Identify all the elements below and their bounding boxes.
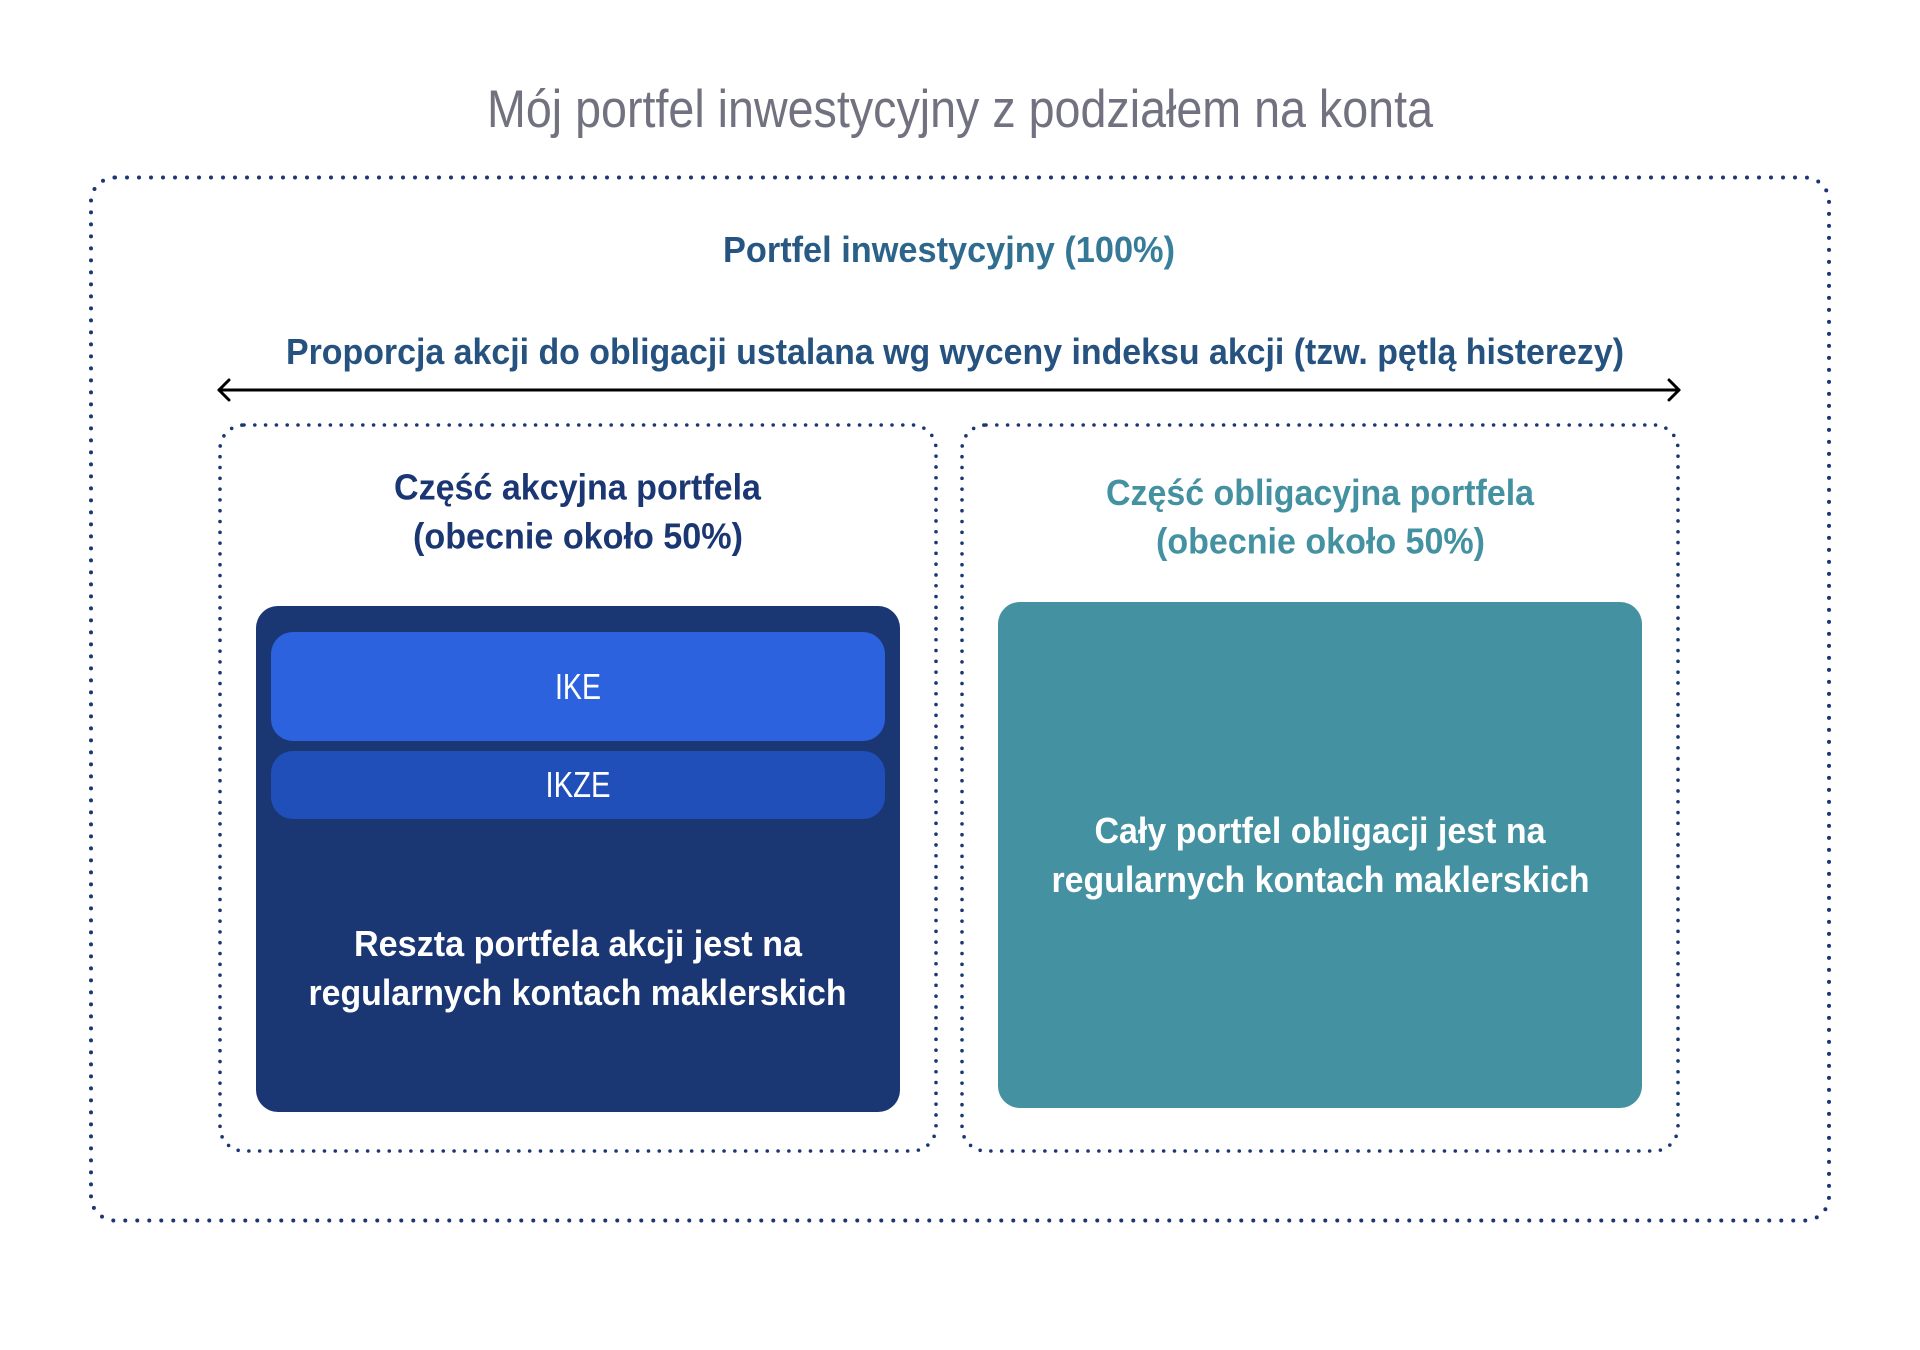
title: Mój portfel inwestycyjny z podziałem na konta (487, 80, 1433, 139)
text: rest of stocks: regularnych kontach maklerskich (308, 972, 846, 1013)
stock accounts block (256, 606, 900, 1112)
bond panel dotted frame (962, 425, 1678, 1151)
outer dotted frame (91, 178, 1829, 1220)
heading: bond part: Część obligacyjna portfela (1106, 472, 1535, 513)
panel: whole portfolio (91, 178, 1829, 1220)
IKE account (271, 632, 885, 741)
text: whole bond portfolio: Cały portfel obligacji jest na (1094, 810, 1546, 851)
IKE account: IKE (555, 666, 601, 707)
heading: portfolio 100%: Portfel inwestycyjny (100%) (723, 229, 1175, 270)
panel: stock part (220, 425, 936, 1151)
bond accounts block (998, 602, 1642, 1108)
heading: stock to bond proportion: Proporcja akcji do obligacji ustalana wg wyceny indeksu akcji (tzw. pętlą histerezy) (286, 331, 1624, 372)
heading: stock part: Część akcyjna portfela (394, 466, 762, 508)
text: whole bond portfolio: regularnych kontach maklerskich (1052, 859, 1590, 900)
IKZE account: IKZE (546, 764, 610, 805)
IKZE account (271, 751, 885, 819)
stock panel dotted frame (220, 425, 936, 1151)
panel: bond part (962, 425, 1678, 1151)
heading: stock part: (obecnie około 50%) (413, 516, 743, 556)
text: rest of stocks: Reszta portfela akcji jest na (354, 923, 803, 964)
heading: bond part: (obecnie około 50%) (1156, 520, 1485, 562)
arrow: double-headed proportion range (219, 380, 1679, 400)
